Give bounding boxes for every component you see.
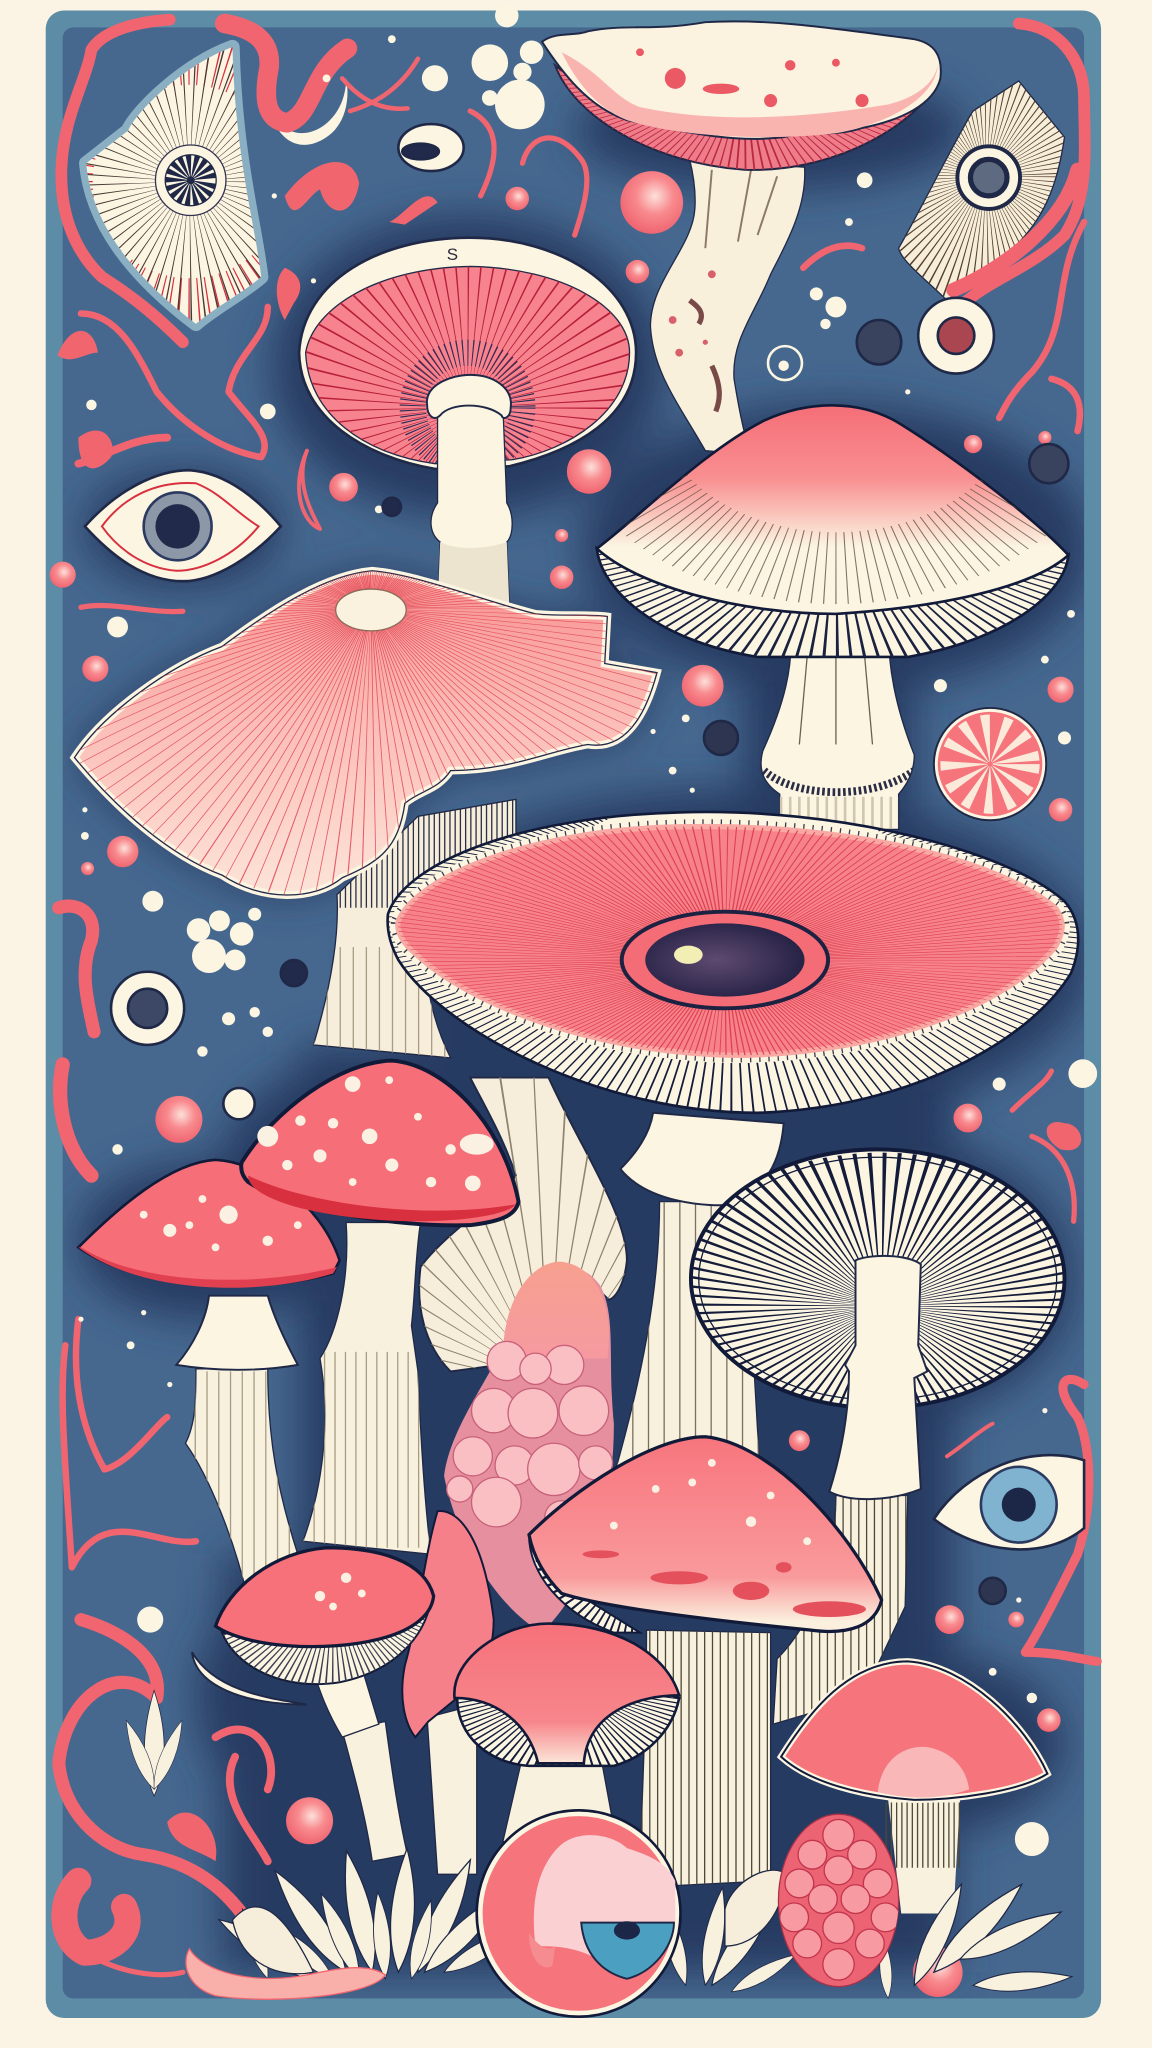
mushroom: pink gills with stem — [299, 238, 636, 607]
side leaf — [192, 1652, 307, 1704]
stem — [176, 1296, 300, 1600]
pale halo around fan — [86, 47, 261, 324]
overlapping tendril — [953, 170, 1078, 290]
fan eye — [155, 145, 226, 216]
small pink blobs — [57, 162, 1081, 1861]
rim — [386, 810, 1080, 1114]
mushroom: large oval cap with dark centre — [386, 810, 1080, 1114]
skirt — [620, 1113, 784, 1205]
mushroom: top pale cap with wavy stem — [536, 0, 953, 455]
cream specks and clusters — [78, 4, 1097, 1856]
stem — [633, 1630, 777, 1887]
mushroom: red spotted cap left — [78, 1160, 340, 1600]
dark orbs: small eyes — [111, 124, 1068, 1604]
eye: lower right — [934, 1455, 1084, 1549]
stem — [650, 159, 805, 455]
mushroom: bell cap right — [595, 404, 1070, 830]
mushroom: ruffled pink cap — [70, 566, 662, 899]
cap — [216, 1548, 434, 1647]
leaves: bottom foliage — [213, 1848, 1073, 1999]
top-left gilled fan — [86, 47, 262, 324]
cap — [78, 1160, 340, 1288]
mushroom: blush spotted cap — [529, 1437, 882, 1887]
stem: under big oval cap — [601, 1113, 784, 1476]
pink bubbles — [50, 171, 1074, 1997]
cap knob — [336, 589, 406, 631]
stem — [888, 1800, 960, 1913]
drip — [529, 1933, 555, 1967]
pink bumpy fungus — [444, 1262, 614, 1633]
speckled letter on cap: S — [447, 245, 458, 264]
stem — [427, 375, 512, 607]
top-right gilled fan — [899, 81, 1078, 300]
highlight — [878, 1747, 969, 1798]
icon: striped pink disc — [934, 708, 1046, 820]
flower buds — [232, 1870, 786, 1974]
gills — [691, 1149, 1064, 1408]
pale halo crescent — [268, 78, 347, 145]
mushroom: round striped gills — [691, 1149, 1064, 1724]
gills — [456, 1696, 681, 1768]
upper stem — [829, 1256, 927, 1499]
cap — [299, 238, 636, 469]
circular badge with eye — [477, 1810, 680, 2017]
cap — [241, 1061, 519, 1225]
mushroom: small spotted cap — [192, 1528, 434, 1861]
cap — [454, 1624, 679, 1763]
fan eye — [957, 146, 1020, 209]
mushroom: smooth pink dome — [781, 1661, 1048, 1913]
iris — [581, 1923, 674, 1979]
gills — [220, 1612, 429, 1686]
stem: curving stem behind big cap — [418, 1076, 628, 1372]
cap — [781, 1661, 1048, 1800]
cap — [529, 1437, 882, 1631]
mushroom: narrow pink cap — [402, 1511, 494, 1874]
lower stem — [764, 1496, 914, 1724]
mushroom: bell with split gills — [454, 1624, 679, 1842]
stem: ruffled mushroom — [313, 799, 522, 1058]
gills — [553, 62, 920, 171]
cream petal bottom left — [186, 1949, 385, 1999]
gill field — [390, 819, 1070, 1064]
cap — [542, 21, 941, 139]
gills — [528, 1538, 643, 1634]
stem — [503, 1757, 616, 1842]
mushroom: red spotted cap centre — [241, 1061, 519, 1554]
gills — [305, 266, 630, 464]
cap — [595, 404, 1070, 616]
stem — [342, 1721, 408, 1861]
pinecone fungus — [778, 1814, 900, 1987]
gills — [595, 546, 1070, 658]
feather plume — [120, 1690, 189, 1796]
central eye — [622, 912, 828, 1008]
eye: upper left — [85, 470, 281, 581]
stem — [303, 1223, 431, 1554]
stem — [760, 658, 915, 830]
